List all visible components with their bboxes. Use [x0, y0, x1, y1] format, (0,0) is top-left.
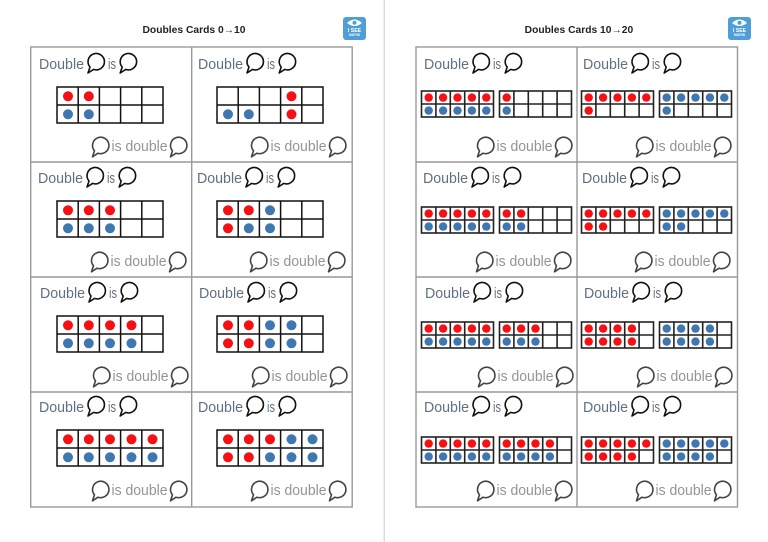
answer prompt: is double	[112, 138, 168, 155]
ten frame	[217, 201, 323, 237]
icon: I see maths logo right	[728, 17, 751, 40]
prompt: is	[109, 285, 117, 302]
answer prompt: is double	[270, 253, 326, 270]
answer prompt	[478, 137, 572, 157]
prompt	[424, 53, 522, 73]
card: double 7 by colour	[582, 167, 732, 272]
prompt: is	[268, 285, 276, 302]
answer prompt: is double	[112, 368, 168, 385]
answer prompt	[636, 481, 731, 501]
answer prompt: is double	[656, 368, 712, 385]
answer prompt	[252, 367, 347, 387]
answer prompt: is double	[270, 482, 326, 499]
icon: I see maths logo left: I SEE	[348, 28, 362, 34]
prompt	[582, 167, 680, 187]
card: double 4	[40, 282, 188, 387]
prompt: is	[107, 170, 115, 187]
ten frames	[582, 322, 732, 348]
answer prompt: is double	[656, 138, 712, 155]
prompt: is	[652, 56, 660, 73]
answer prompt: is double	[270, 138, 326, 155]
answer prompt: is double	[496, 482, 552, 499]
answer prompt	[636, 252, 730, 272]
ten frames	[422, 437, 572, 463]
prompt: is	[493, 56, 501, 73]
prompt	[40, 282, 138, 302]
prompt	[39, 396, 137, 416]
ten frame	[217, 87, 323, 123]
ten frames	[422, 322, 572, 348]
answer prompt	[252, 481, 346, 501]
prompt: Double	[583, 56, 628, 73]
prompt: Double	[583, 399, 628, 416]
answer prompt: is double	[110, 253, 166, 270]
ten frame	[57, 87, 163, 123]
prompt: is	[652, 399, 660, 416]
ten frame	[217, 430, 323, 466]
answer prompt: is double	[112, 482, 168, 499]
prompt: is	[267, 399, 275, 416]
prompt: Double	[423, 170, 468, 187]
prompt: Double	[424, 56, 469, 73]
card: double 8 by colour	[582, 282, 732, 387]
prompt	[425, 282, 523, 302]
icon: I see maths logo right: MATHS	[734, 33, 745, 37]
card: double 2 split	[198, 53, 346, 157]
icon: I see maths logo left	[343, 17, 366, 40]
card: double 3	[38, 167, 186, 272]
prompt: Double	[584, 285, 629, 302]
prompt: Double	[199, 285, 244, 302]
card: double 8	[422, 282, 573, 387]
prompt: Double	[424, 399, 469, 416]
answer prompt	[252, 137, 346, 157]
prompt: Double	[38, 170, 83, 187]
title: doubles cards 10 to 20: Doubles Cards 10→20	[525, 25, 634, 36]
answer prompt: is double	[496, 253, 552, 270]
prompt: is	[494, 285, 502, 302]
prompt: Double	[39, 56, 84, 73]
answer prompt	[476, 252, 571, 272]
prompt: is	[108, 56, 116, 73]
prompt: is	[108, 399, 116, 416]
card: double 5	[39, 396, 187, 501]
answer prompt: is double	[498, 368, 554, 385]
prompt	[39, 53, 137, 73]
card: double 5 mixed	[198, 396, 346, 501]
answer prompt	[92, 481, 187, 501]
card: double 4 mixed	[199, 282, 347, 387]
prompt: is	[266, 170, 274, 187]
prompt	[424, 396, 522, 416]
answer prompt: is double	[654, 253, 710, 270]
prompt: is	[267, 56, 275, 73]
prompt	[583, 396, 681, 416]
prompt	[198, 53, 296, 73]
panel: grid of cards 10 to 20	[416, 47, 738, 507]
answer prompt	[250, 252, 345, 272]
prompt	[198, 396, 296, 416]
prompt	[583, 53, 681, 73]
prompt	[197, 167, 295, 187]
answer prompt	[478, 367, 573, 387]
card: double 6	[422, 53, 572, 157]
answer prompt	[636, 137, 731, 157]
prompt: Double	[198, 399, 243, 416]
prompt: Double	[582, 170, 627, 187]
answer prompt: is double	[272, 368, 328, 385]
answer prompt	[478, 481, 572, 501]
title: doubles cards 0 to 10: Doubles Cards 0→10	[142, 25, 246, 36]
prompt: is	[651, 170, 659, 187]
card: double 7	[422, 167, 572, 272]
card: double 6 by colour	[582, 53, 732, 157]
ten frames	[422, 207, 572, 233]
prompt: Double	[39, 399, 84, 416]
ten frame	[57, 316, 163, 352]
answer prompt	[92, 137, 187, 157]
panel: grid of cards 0 to 10	[31, 47, 352, 507]
ten frames	[582, 207, 732, 233]
prompt: Double	[425, 285, 470, 302]
prompt	[38, 167, 136, 187]
prompt	[199, 282, 297, 302]
card: double 9	[422, 396, 572, 501]
page divider	[384, 0, 385, 542]
ten frames	[422, 91, 572, 117]
card: double 3 mixed	[197, 167, 345, 272]
answer prompt: is double	[656, 482, 712, 499]
answer prompt: is double	[496, 138, 552, 155]
prompt: is	[493, 399, 501, 416]
icon: I see maths logo left: MATHS	[349, 33, 360, 37]
answer prompt	[638, 367, 732, 387]
prompt: Double	[40, 285, 85, 302]
answer prompt	[92, 252, 186, 272]
prompt: is	[492, 170, 500, 187]
icon: I see maths logo right: I SEE	[733, 28, 747, 34]
card: double 9 by colour	[582, 396, 732, 501]
card: double 2	[39, 53, 187, 157]
ten frames	[582, 91, 732, 117]
prompt	[423, 167, 521, 187]
ten frame	[57, 430, 163, 466]
prompt	[584, 282, 682, 302]
ten frames	[582, 437, 732, 463]
ten frame	[217, 316, 323, 352]
prompt: Double	[197, 170, 242, 187]
prompt: Double	[198, 56, 243, 73]
answer prompt	[94, 367, 188, 387]
prompt: is	[653, 285, 661, 302]
ten frame	[57, 201, 163, 237]
